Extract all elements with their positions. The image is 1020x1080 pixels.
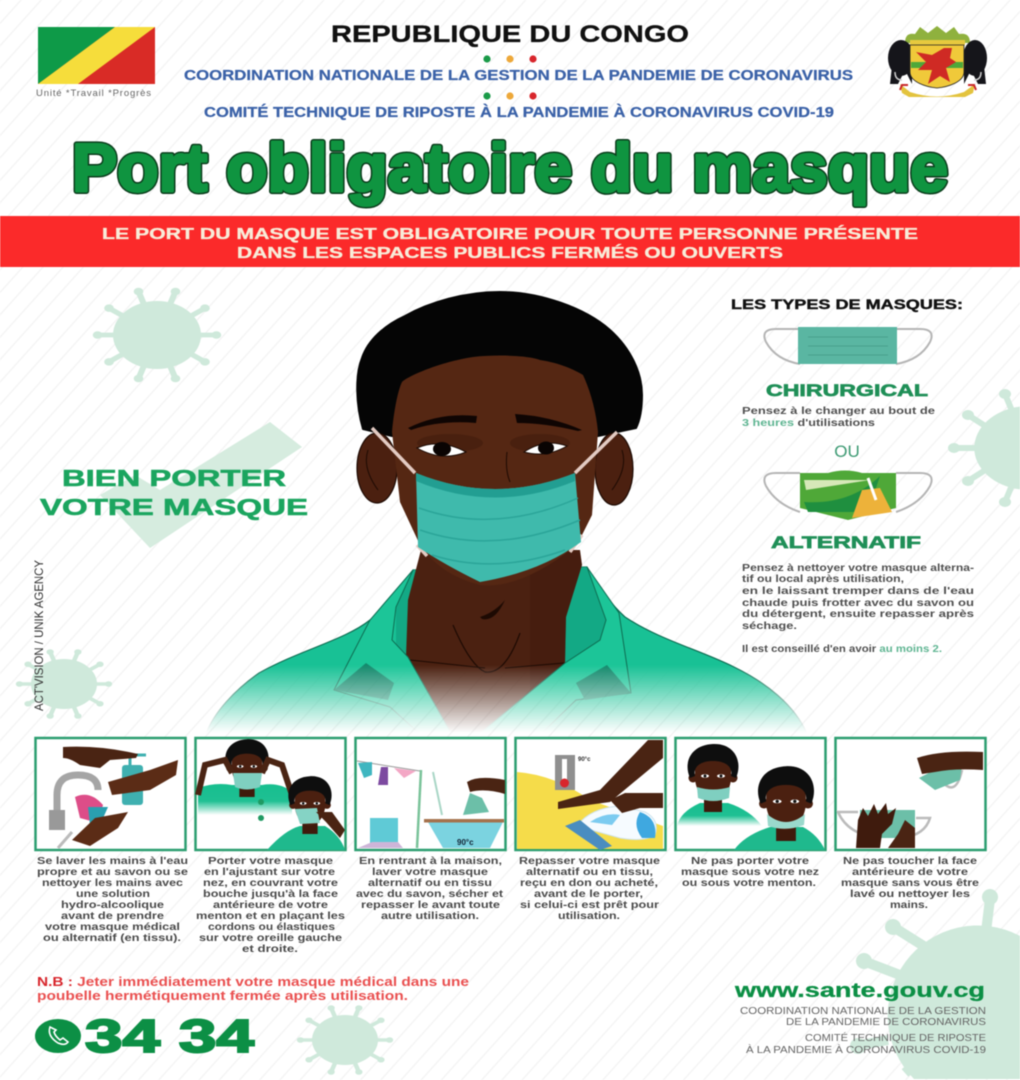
caption: une solution [76, 888, 150, 900]
text: chirurgical advice: 3 heures d'utilisations [742, 417, 875, 429]
comite line: COMITÉ TECHNIQUE DE RIPOSTE À LA PANDEMIE À CORONAVIRUS COVID-19 [204, 104, 834, 121]
caption [37, 855, 188, 944]
icon: tap, soap and hands [49, 747, 178, 848]
icon: two men with lowered masks [677, 744, 825, 850]
eyebrows [408, 414, 582, 431]
caption: lavé ou nettoyer les [850, 888, 970, 900]
decorative large virus bottom right [850, 889, 1020, 1079]
footer credits: À LA PANDEMIE À CORONAVIRUS COVID-19 [746, 1043, 986, 1056]
caption: Ne pas porter votre [691, 855, 809, 867]
flag motto: Unité *Travail *Progrès [36, 88, 151, 99]
note N.B: N.B : Jeter immédiatement votre masque médical dans une [37, 975, 469, 989]
frame [516, 738, 666, 850]
caption: Ne pas toucher la face [843, 855, 977, 867]
face [392, 356, 598, 586]
text: alternative advice: Il est conseillé d'en avoir au moins 2. [742, 643, 942, 655]
frame [196, 738, 346, 850]
ear loops [372, 428, 617, 556]
caption: menton et en plaçant les [196, 910, 345, 922]
flag of Congo [38, 27, 155, 84]
caption [841, 855, 979, 911]
caption [681, 855, 819, 889]
footer credits: DE LA PANDEMIE DE CORONAVIRUS [786, 1016, 986, 1028]
credit vertical: ACT'VISION / UNIK AGENCY [32, 560, 46, 711]
icon: iron and thermometer: 90°c [578, 757, 591, 763]
label: alternatif: ALTERNATIF [771, 533, 921, 552]
face shading [417, 434, 570, 452]
decorative virus top left [93, 288, 221, 382]
text: alternative advice: du détergent, ensuite repasser après [742, 608, 974, 620]
frame [36, 738, 186, 850]
caption: antérieure de votre [852, 866, 968, 878]
caption: antérieure de votre [213, 899, 328, 911]
caption: si celui-ci est prêt pour [520, 899, 659, 911]
caption: reçu en don ou acheté, [520, 877, 658, 889]
decorative virus left [16, 649, 112, 719]
nose line [506, 452, 510, 482]
checkmark shape behind heading [100, 422, 302, 548]
caption: masque sans vous être [841, 877, 979, 889]
panel: types of masks [731, 297, 975, 655]
caption: ou sous votre menton. [682, 877, 816, 889]
icon: two men adjusting masks [198, 739, 345, 850]
caption: sur votre oreille gauche [199, 932, 342, 944]
icon: alternative mask [764, 470, 932, 520]
caption: en l'ajustant sur votre [204, 866, 335, 878]
caption: propre et au savon ou se [37, 866, 188, 878]
caption: avant de le porter, [534, 888, 643, 900]
torso with shirt and neck [206, 550, 807, 735]
label: ou: OU [834, 442, 860, 461]
text: alternative advice: séchage. [742, 620, 797, 632]
caption: avant de prendre [61, 910, 164, 922]
caption: bouche jusqu'à la face [203, 888, 338, 900]
caption: repasser le avant toute [361, 899, 500, 911]
heading: bien porter votre masque: VOTRE MASQUE [40, 494, 308, 520]
red banner: DANS LES ESPACES PUBLICS FERMÉS OU OUVERTS [237, 243, 783, 262]
frame [356, 738, 506, 850]
caption: Porter votre masque [208, 855, 333, 867]
label: chirurgical: CHIRURGICAL [766, 381, 928, 400]
caption: cordons ou élastiques [208, 921, 335, 933]
icon: coat of arms [888, 26, 987, 97]
icon: iron and thermometer [517, 740, 663, 850]
caption: autre utilisation. [381, 910, 479, 922]
panel: step 1 wash hands [36, 738, 188, 944]
panel: step 6 do not touch [836, 738, 986, 911]
note N.B [37, 975, 469, 1003]
caption: Se laver les mains à l'eau [37, 855, 188, 867]
eyes [417, 442, 567, 456]
ears [357, 433, 633, 505]
hair [357, 292, 642, 436]
caption [519, 855, 660, 922]
heading: bien porter votre masque: BIEN PORTER [62, 465, 287, 491]
coordination line: COORDINATION NATIONALE DE LA GESTION DE LA PANDEMIE DE CORONAVIRUS [184, 68, 853, 84]
caption: masque sous votre nez [681, 866, 819, 878]
caption: votre masque médical [45, 921, 180, 933]
text: chirurgical advice: Pensez à le changer au bout de [742, 405, 935, 417]
dots row 1 [483, 55, 537, 63]
icon: clothes line and basin: 90°c [457, 838, 474, 847]
footer credits: COMITÉ TECHNIQUE DE RIPOSTE [805, 1031, 986, 1044]
icon: phone [35, 1019, 81, 1053]
caption: alternatif ou en tissu [368, 877, 492, 889]
caption: et droite. [242, 943, 298, 955]
caption: Repasser votre masque [519, 855, 660, 867]
frame [676, 738, 826, 850]
text: alternative advice: tif ou local après utilisation, [742, 573, 904, 585]
caption: alternatif ou en tissu, [526, 866, 653, 878]
text: alternative advice: chaude puis frotter avec du savon ou [742, 597, 974, 609]
illustration: man wearing mask [206, 292, 807, 735]
caption: ou alternatif (en tissu). [43, 932, 181, 944]
dots row 2 [483, 92, 537, 100]
red banner [0, 216, 1020, 267]
header heading: REPUBLIQUE DU CONGO [331, 21, 689, 48]
red banner: LE PORT DU MASQUE EST OBLIGATOIRE POUR TOUTE PERSONNE PRÉSENTE [102, 224, 918, 243]
panel: step 3 wash mask [356, 738, 506, 922]
phone number: 34 34 [85, 1010, 255, 1062]
surgical mask [416, 473, 581, 582]
footer credits: COORDINATION NATIONALE DE LA GESTION [740, 1005, 986, 1017]
caption: hydro-alcoolique [61, 899, 164, 911]
title: Port obligatoire du masque [72, 130, 948, 206]
decorative virus bottom [297, 1005, 393, 1075]
heading: bien porter votre masque [40, 465, 308, 520]
text: alternative advice: Pensez à nettoyer votre masque alterna- [742, 562, 975, 574]
title: Port obligatoire du masque [72, 130, 948, 206]
website: www.sante.gouv.cg [734, 980, 985, 1002]
caption: En rentrant à la maison, [359, 855, 502, 867]
text: chirurgical advice [742, 405, 935, 429]
panel: step 4 iron mask [516, 738, 666, 922]
icon: surgical mask [764, 327, 932, 364]
caption: nez, en couvrant votre [203, 877, 338, 889]
caption: mains. [890, 899, 928, 911]
decorative virus right [948, 389, 1020, 507]
caption: laver votre masque [372, 866, 488, 878]
caption [196, 855, 345, 955]
caption: utilisation. [558, 910, 620, 922]
caption [356, 855, 504, 922]
panel: step 5 wrong wearing [676, 738, 826, 889]
footer credits [740, 1005, 986, 1056]
heading: types: LES TYPES DE MASQUES: [731, 297, 963, 312]
caption: avec du savon, sécher et [356, 888, 504, 900]
icon: hands holding masks [838, 752, 983, 848]
caption: nettoyer les mains avec [42, 877, 183, 889]
panel: step 2 adjust mask [196, 738, 346, 955]
text: alternative advice [742, 562, 975, 655]
icon: clothes line and basin [357, 761, 505, 848]
frame [836, 738, 986, 850]
text: alternative advice: en le laissant tremper dans de l'eau [742, 585, 974, 597]
note N.B: poubelle hermétiquement fermée après utilisation. [37, 989, 408, 1003]
